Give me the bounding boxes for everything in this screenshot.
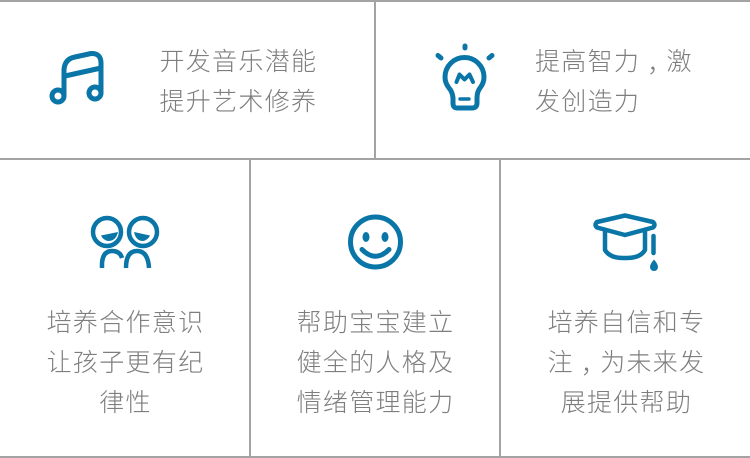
- text: emotion: 健全的人格及: [297, 349, 454, 377]
- text: emotion: 情绪管理能力: [297, 389, 454, 417]
- text: emotion: 帮助宝宝建立: [297, 309, 454, 337]
- text: confidence: 培养自信和专: [548, 309, 705, 337]
- text: cooperation: 培养合作意识: [47, 309, 204, 337]
- text: confidence: [548, 309, 705, 417]
- text: intelligence: [535, 48, 693, 116]
- text: intelligence: 发创造力: [535, 88, 640, 116]
- text: intelligence: 提高智力 ，激: [535, 48, 693, 78]
- text: music: 提升艺术修养: [160, 88, 317, 116]
- text: music: 开发音乐潜能: [160, 48, 317, 76]
- text: cooperation: 律性: [99, 389, 152, 417]
- text: cooperation: 让孩子更有纪: [47, 349, 204, 377]
- text: emotion: [297, 309, 454, 417]
- text: confidence: 展提供帮助: [561, 389, 692, 417]
- text: cooperation: [47, 309, 204, 417]
- text: music: [160, 48, 317, 116]
- text: confidence: 注 ，为未来发: [548, 349, 705, 379]
